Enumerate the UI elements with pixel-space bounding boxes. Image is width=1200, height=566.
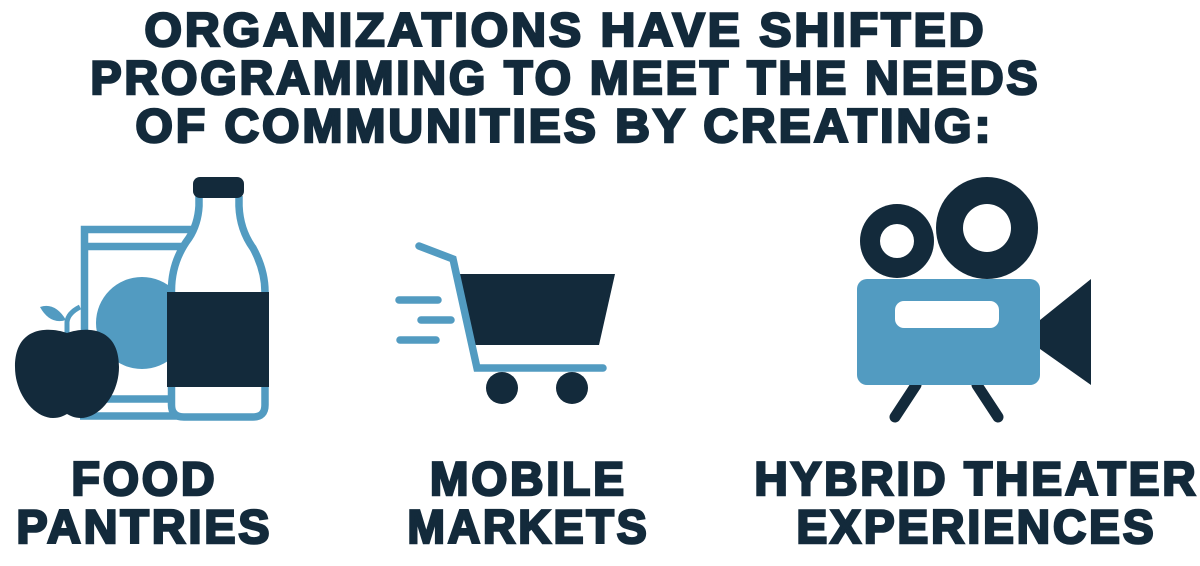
label: hybrid theater experiences: HYBRID THEATER [754,452,1198,505]
title: OF COMMUNITIES BY CREATING: [136,99,993,152]
title: PROGRAMMING TO MEET THE NEEDS [90,51,1040,104]
title [90,3,1040,152]
icon: video camera [857,177,1091,417]
icon: food pantry [15,177,269,418]
label: food pantries: FOOD [72,452,218,505]
label: mobile markets: MOBILE [430,452,627,505]
label: mobile markets: MARKETS [408,500,650,553]
label: hybrid theater experiences [754,452,1198,553]
label: food pantries [16,452,272,553]
label: mobile markets [408,452,650,553]
title: ORGANIZATIONS HAVE SHIFTED [144,3,986,56]
label: hybrid theater experiences: EXPERIENCES [796,500,1156,553]
icon: shopping cart [399,246,615,404]
label: food pantries: PANTRIES [16,500,272,553]
